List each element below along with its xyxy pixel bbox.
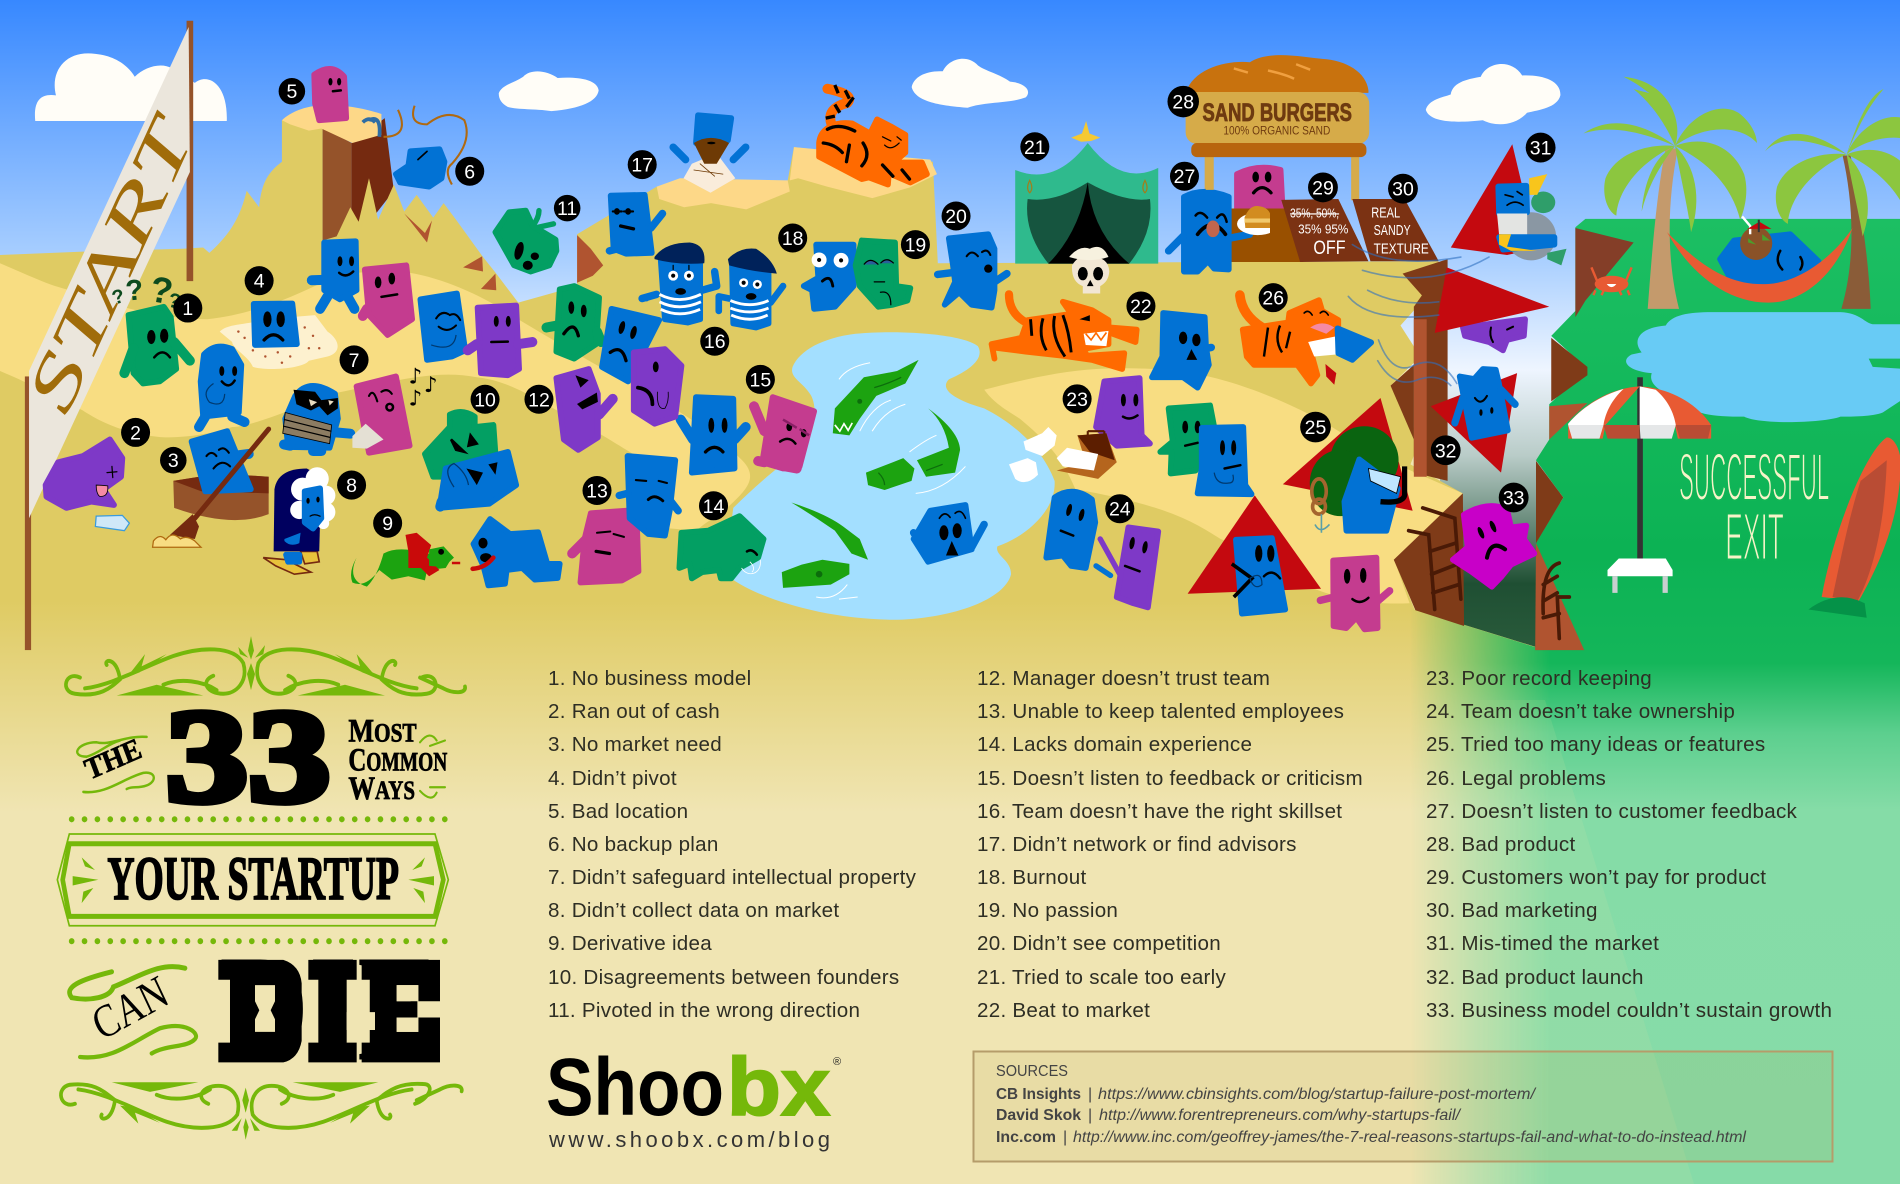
question marks: ? [147,268,176,312]
badge 3 [160,447,187,473]
badge 9 [373,509,402,538]
character 5: bad location [314,69,346,120]
crocodile top [833,360,919,435]
music notes: ♪ [424,373,437,398]
badge 7: 7 [349,350,359,372]
crocodile bottom [782,502,868,599]
source Inc.com: http://www.inc.com/geoffrey-james/the-7-real-reasons-startups-fail-and-what-to-do-instead.html [1073,1129,1746,1146]
badge 11 [554,195,580,221]
character 31: duck mistimed [1497,174,1567,265]
character blue hugging [420,294,465,360]
badge 26 [1259,283,1288,312]
sign lettering: SAND BURGERS [1202,100,1352,127]
sources box [974,1052,1832,1162]
badge 14 [699,491,728,520]
badge 20 [942,201,971,231]
source CB Insights: | [1088,1086,1092,1103]
badge 5 [279,78,305,104]
character 17 small blue [609,195,663,254]
palm tree 2 [1765,89,1900,309]
river [729,332,1055,620]
surfboard [1808,437,1900,618]
shoobx logo [546,1042,841,1133]
badge 26: 26 [1262,288,1284,310]
badge 31: 31 [1530,138,1551,160]
counter with plate [1270,209,1300,262]
character 27: doesn't listen to customer feedback [1169,157,1303,272]
character blue frowning [602,297,659,381]
badge 5: 5 [286,81,297,103]
character 16: wrong skillset mime 1 [642,243,717,323]
badge 2: 2 [130,422,141,444]
top ornament [66,636,465,696]
badge 22: 22 [1130,296,1152,318]
shoobx logo: ® [833,1056,841,1068]
badge 14: 14 [703,496,725,518]
side table [1608,558,1673,576]
character 3: no market need [153,429,269,547]
character 8: no data [263,467,335,574]
sand patch of pivot [220,315,338,369]
badge 31 [1526,133,1556,163]
tiger on mesa [819,85,927,184]
badge 13: 13 [586,481,608,503]
badge 22 [1126,291,1155,320]
badge 30: 30 [1392,179,1414,201]
character 12: manager doesn't trust team [556,369,613,450]
badge 4: 4 [254,271,265,293]
character blue squint [619,456,678,536]
mesa cliff 5 [323,118,394,249]
character 33: unsustainable growth [1453,506,1534,587]
red triangle 32 [1431,373,1517,473]
bottom ornament [61,1082,462,1140]
badge 13 [582,476,612,505]
reasons list column 2: 19. No passion [977,899,1118,922]
reasons list column 3: 28. Bad product [1426,833,1575,856]
character blue crawling [473,519,560,585]
badge 1: 1 [182,298,193,320]
badge 21: 21 [1024,137,1046,159]
sign 29: discounts: 35%, 50%, [1290,206,1339,221]
badge 3: 3 [168,450,179,472]
green fade over lower right [1400,605,1900,1184]
red triangles 31 [1451,144,1537,255]
badge 18: 18 [782,228,804,250]
source CB Insights: https://www.cbinsights.com/blog/startup-failure-post-mortem/ [1098,1086,1537,1103]
start word: START [11,101,212,423]
oasis pond [1626,312,1900,422]
question marks: ? [165,289,184,314]
light sand hills [0,263,750,531]
character top group blue [312,241,357,309]
cloud 4 [1426,64,1560,124]
badge 15 [746,365,775,394]
badge 29: 29 [1312,177,1334,199]
character 4: didn't pivot [254,303,297,345]
dotted rule bottom [72,933,445,950]
badge 6 [455,157,484,186]
character purple side [634,349,681,424]
light sand right of river [984,368,1463,604]
badge 21 [1020,132,1049,161]
reasons list column 1: 4. Didn’t pivot [548,767,677,790]
reasons list column 2: 13. Unable to keep talented employees [977,700,1344,723]
words most common ways: MOST [348,713,417,749]
badge 12 [524,385,553,414]
reasons list column 3: 30. Bad marketing [1426,899,1598,922]
reasons list column 3: 27. Doesn’t listen to customer feedback [1426,800,1798,823]
character 9: derivative idea lizard [351,533,460,587]
small flourishes [420,736,445,798]
character 2: ran out of cash [46,439,129,531]
reasons list column 2: 22. Beat to market [977,999,1150,1022]
reasons list column 1 [548,667,917,1022]
music notes: ♪ [408,386,422,411]
triangle 24 right [1188,495,1321,594]
badge 11: 11 [557,198,577,220]
sign 30: real sandy texture: REAL [1371,205,1400,222]
reasons list column 1: 3. No market need [548,733,722,756]
scene: middle section [619,85,1303,620]
palm tree 1 [1583,77,1757,309]
badge 33: 33 [1503,488,1524,510]
big 33: 33 [166,683,331,830]
sign 29: discounts: OFF [1313,237,1346,258]
word THE with flourish: THE [80,732,146,787]
big word DIE: DIE [219,924,440,1093]
sky [0,0,1900,370]
badge 24: 24 [1109,499,1131,521]
successful exit person in hammock [1667,216,1853,303]
badge 19 [901,230,930,259]
badge 17: 17 [631,155,653,177]
reasons list column 1: 2. Ran out of cash [548,700,720,723]
badge 24 [1105,494,1134,523]
character pink neutral [363,265,412,335]
sand burger sign 28 [1186,55,1369,200]
badge 16: 16 [704,331,726,353]
character 10: disagreements between founders [425,412,516,508]
badge 20: 20 [945,206,967,228]
sign 30: real sandy texture [1352,199,1439,261]
source David Skok: David Skok [996,1107,1081,1124]
crab [1591,267,1632,295]
island green [1536,219,1900,663]
reasons list column 2: 21. Tried to scale too early [977,966,1227,989]
badge 25: 25 [1305,417,1326,439]
shoobx logo: bx [727,1042,830,1133]
badge 16 [700,327,729,356]
ledge rock [1394,493,1464,626]
reasons list column 3: 26. Legal problems [1426,767,1606,790]
character 15: doesn't listen to feedback [681,397,746,473]
reasons list column 1: 6. No backup plan [548,833,719,856]
your startup plaque [57,834,448,926]
reasons list column 2: 16. Team doesn’t have the right skillset [977,800,1342,823]
hammock [1667,228,1853,303]
start banner [11,27,212,518]
reasons list column 1: 7. Didn’t safeguard intellectual property [548,866,917,889]
badge 19: 19 [905,235,926,257]
reasons list column 3: 25. Tried too many ideas or features [1426,733,1765,756]
question marks [110,268,184,314]
chasm rocks, right part [1186,55,1900,663]
tiger 26: legal problems [1240,295,1371,385]
character 17 beard: didn't network [673,115,746,193]
sign 30: real sandy texture: TEXTURE [1374,242,1429,258]
lighter diagonal facet in the fade [1502,700,1694,1184]
your startup plaque: YOUR STARTUP [107,844,399,913]
reasons list column 2: 14. Lacks domain experience [977,733,1252,756]
source Inc.com: Inc.com [996,1129,1056,1146]
character 1: no business model [110,268,190,383]
character swimming [914,505,984,562]
source CB Insights: CB Insights [996,1086,1081,1103]
briefcase and papers [1009,427,1117,482]
reasons list column 2: 17. Didn’t network or find advisors [977,833,1297,856]
logo url: www.shoobx.com/blog [548,1127,830,1152]
mesa tops [282,105,937,209]
reasons list column 2: 20. Didn’t see competition [977,932,1221,955]
character 13: unable to keep talent [572,510,638,582]
brown rock notches [404,214,496,290]
island cliff faces [1535,228,1634,650]
reasons list column 1: 1. No business model [548,667,751,690]
source Inc.com: | [1063,1129,1067,1146]
red triangle middle [1435,267,1549,333]
cloud 3 [912,59,1028,108]
sign 29: discounts [1281,199,1368,262]
badge 15: 15 [750,369,771,391]
skull [1069,247,1109,294]
words most common ways: WAYS [348,770,415,806]
flag pole left [25,376,31,650]
reasons list column 1: 9. Derivative idea [548,932,712,955]
tiger 22: beat to market [992,294,1137,369]
reasons list column 2: 18. Burnout [977,866,1086,889]
badge 25 [1300,412,1331,442]
mesa 2 side rock [577,235,603,283]
characters green and blue [1160,405,1252,494]
reasons list column 3 [1426,667,1832,1022]
sign 29: discounts: 35% 95% [1298,222,1348,236]
music notes [408,364,437,411]
source David Skok: | [1088,1107,1092,1124]
badge 27: 27 [1174,166,1195,188]
character 32: bad product launch [1455,369,1515,438]
character pink singing [352,364,437,453]
character 20: didn't see competition [938,234,1007,308]
badge 27 [1170,162,1199,191]
cloud 1 [35,53,227,121]
sand burger sign 28: 100% ORGANIC SAND [1223,126,1330,138]
reasons list column 2 [977,667,1363,1022]
reasons list column 1: 5. Bad location [548,800,688,823]
shoobx logo: Shoo [546,1042,724,1133]
dotted rule top [72,811,445,828]
word CAN with flourish: CAN [84,966,176,1050]
words most common ways [348,713,447,806]
crocodile middle [866,408,965,493]
badge 28 [1167,86,1199,117]
words most common ways: COMMON [348,741,447,778]
music notes: ♪ [408,364,422,389]
badge 7 [340,345,369,374]
character 7: didn't safeguard IP [283,386,350,451]
character 25: too many features [1310,426,1405,533]
badge 10: 10 [474,389,496,411]
badge 17 [628,150,657,179]
character 19: no passion [856,240,910,307]
reasons list column 3: 23. Poor record keeping [1426,667,1652,690]
badge 29 [1308,172,1338,202]
character 24: team doesn't take ownership [1046,492,1158,607]
character purple neutral [468,306,532,375]
badge 30 [1388,174,1418,204]
badge 28: 28 [1172,92,1194,114]
character green frowning [546,286,601,359]
character 18: burnout [804,245,854,309]
left cliff column [1391,259,1448,481]
reasons list column 3: 31. Mis-timed the market [1426,932,1659,955]
badge 32 [1431,435,1461,465]
numbered badges [121,78,1556,538]
reasons list column 2: 12. Manager doesn’t trust team [977,667,1270,690]
character 23: poor record keeping [1096,378,1150,446]
tent 21 [1015,121,1158,264]
ladder right [1543,563,1569,638]
flag pole right [187,21,193,281]
badge 2 [121,418,150,447]
chasm gradient [1440,370,1560,655]
badge 1 [173,294,202,323]
source David Skok: http://www.forentrepreneurs.com/why-startups-fail/ [1099,1107,1462,1124]
character 11: pivoted in wrong direction [495,211,556,272]
character blue smiling [199,347,245,427]
question marks: ? [124,274,145,308]
reasons list column 1: 8. Didn’t collect data on market [548,899,839,922]
badge 8 [337,471,366,500]
character pink angry [754,397,814,468]
badge 10 [471,385,500,414]
character blue tied [1232,538,1285,614]
character 16: wrong skillset mime 2 [719,248,783,328]
successful exit text [1679,440,1829,574]
title block [57,636,465,1140]
reasons list column 3: 24. Team doesn’t take ownership [1426,700,1735,723]
reasons list column 1: 10. Disagreements between founders [548,966,899,989]
character pink smiling [1320,558,1390,629]
successful exit text: EXIT [1725,500,1784,574]
reasons list column 2: 15. Doesn’t listen to feedback or criticism [977,767,1363,790]
badge 6: 6 [464,161,475,183]
badge 33 [1499,483,1529,512]
badge 12: 12 [528,389,550,411]
badge 4 [245,266,274,295]
badge 8: 8 [346,475,357,497]
badge 23 [1063,384,1092,413]
character blue worried [1152,313,1211,388]
ladder left [1409,508,1461,609]
badge 23: 23 [1066,389,1088,411]
reasons list column 3: 33. Business model couldn’t sustain growth [1426,999,1832,1022]
question marks: ? [110,285,127,310]
cloud 2 [499,71,599,111]
character 6: no backup plan [363,106,467,187]
reasons list column 3: 32. Bad product launch [1426,966,1644,989]
character purple under triangle [1463,319,1525,350]
badge 32: 32 [1435,440,1457,462]
triangle 25 [1283,398,1413,511]
beach umbrella [1568,377,1711,593]
badge 18 [778,223,807,252]
badge 9: 9 [382,513,393,535]
reasons list column 1: 11. Pivoted in the wrong direction [548,999,860,1022]
character 14: lacks domain experience [679,516,764,578]
sound waves [1348,245,1489,386]
sources box: SOURCES [996,1063,1068,1080]
reasons list column 3: 29. Customers won’t pay for product [1426,866,1766,889]
sign 30: real sandy texture: SANDY [1374,223,1411,239]
